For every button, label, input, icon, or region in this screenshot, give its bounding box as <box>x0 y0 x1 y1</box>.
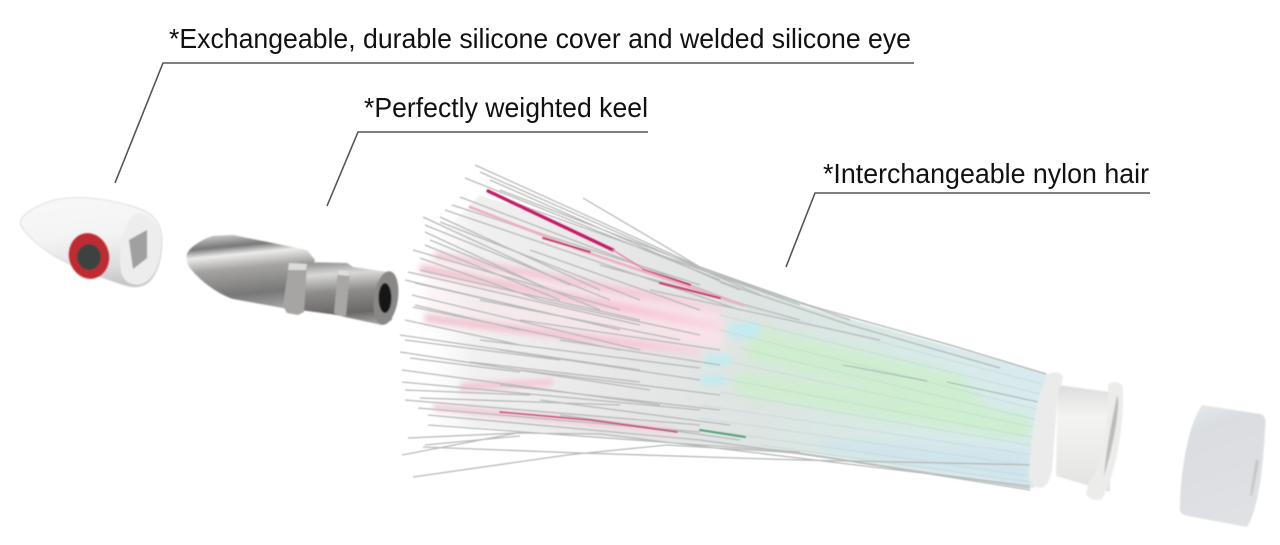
pale pink hair wash <box>420 250 725 350</box>
nylon hair bundle <box>400 165 1048 490</box>
icon: metal keel <box>187 235 402 326</box>
keel second collar <box>334 270 350 316</box>
heading: nylon hair label: *Interchangeable nylon hair <box>823 158 1149 189</box>
top edge of hair bundle <box>700 268 1046 488</box>
icon: end cap <box>1180 405 1265 527</box>
icon: hair collar spool <box>1029 372 1123 500</box>
keel bore <box>370 270 402 326</box>
dark hair streaks <box>843 365 1038 402</box>
magenta hair strands <box>470 191 745 437</box>
cover end face <box>120 213 161 285</box>
cover hole <box>129 230 147 269</box>
heading: nylon hair label <box>786 158 1150 267</box>
heading: silicone cover label: *Exchangeable, durable silicone cover and welded silicone eye <box>169 23 911 54</box>
heading: keel label <box>327 92 648 206</box>
rear flange <box>1086 382 1123 500</box>
pink hair bands <box>420 252 725 433</box>
grey hair strands <box>400 165 1040 490</box>
green and blue hair bands <box>735 325 1030 485</box>
teal hair texture <box>700 300 1042 482</box>
silicone eye <box>64 229 114 283</box>
keel bullet body <box>187 235 315 312</box>
front flange <box>1029 372 1063 488</box>
keel neck and tail <box>300 262 392 325</box>
icon: silicone cover with eye <box>20 198 162 287</box>
keel first collar <box>283 263 307 315</box>
heading: keel label: *Perfectly weighted keel <box>364 92 648 123</box>
heading: silicone cover label <box>115 23 914 183</box>
